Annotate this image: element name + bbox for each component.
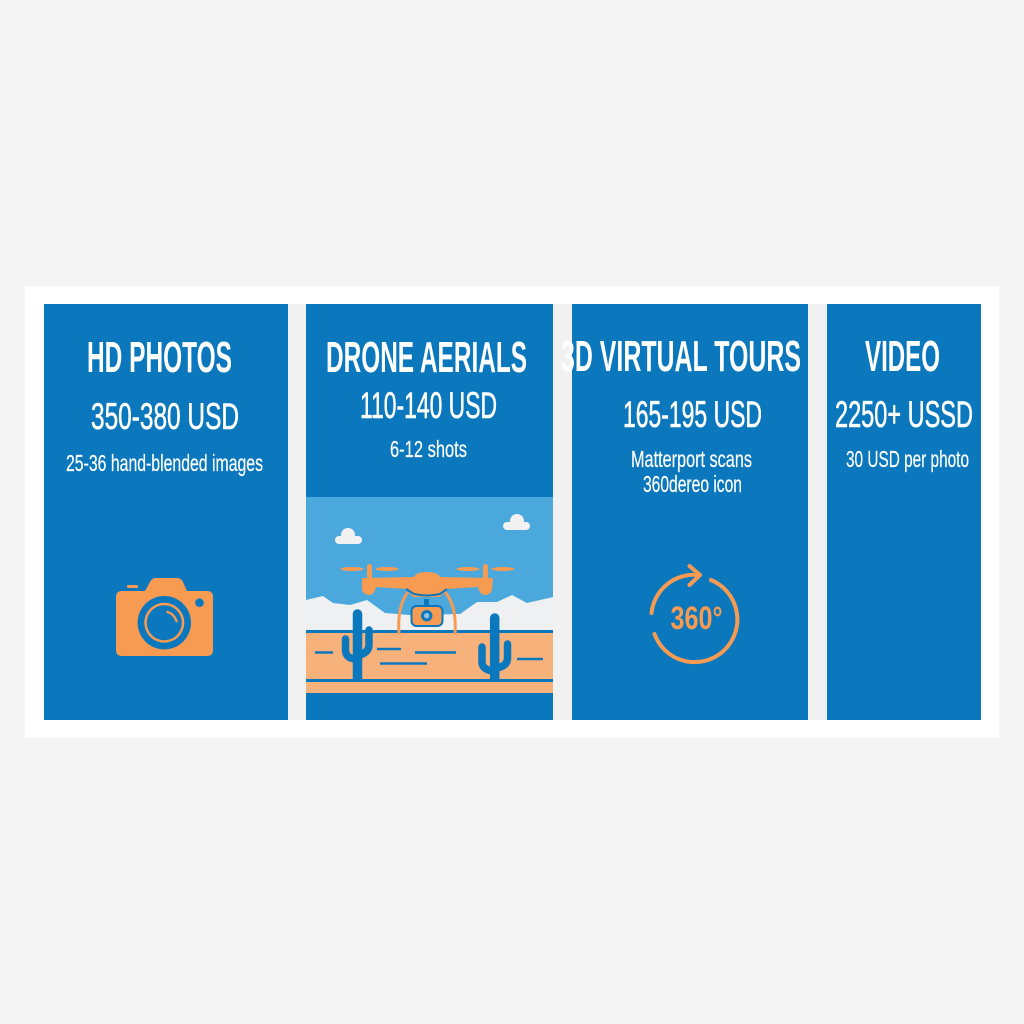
price: drone aerials: 110-140 USD xyxy=(360,385,497,426)
gimbal outline xyxy=(406,589,447,596)
propellers xyxy=(340,564,514,579)
panel: drone aerials xyxy=(306,304,553,720)
cactus left xyxy=(346,609,369,680)
heading: video: VIDEO xyxy=(865,332,940,381)
heading: drone aerials: DRONE AERIALS xyxy=(326,333,527,382)
outer card xyxy=(25,286,999,738)
camera pod xyxy=(412,606,442,626)
panel: HD photos xyxy=(44,304,288,720)
heading: 3D virtual tours: 3D VIRTUAL TOURS xyxy=(561,332,801,381)
description: 3D virtual tours xyxy=(631,446,752,497)
heading: HD photos: HD PHOTOS xyxy=(87,333,232,382)
drone xyxy=(340,564,514,634)
sand xyxy=(306,631,553,693)
description: 3D virtual tours: Matterport scans xyxy=(631,446,752,472)
clouds xyxy=(335,514,530,544)
snowy mountains xyxy=(306,595,553,632)
landing legs xyxy=(399,592,455,634)
description: 3D virtual tours: 360dereo icon xyxy=(643,471,742,497)
description: drone aerials: 6-12 shots xyxy=(390,436,467,462)
price: 3D virtual tours: 165-195 USD xyxy=(623,394,762,435)
panel: 3D virtual tours xyxy=(561,304,808,720)
cactus right xyxy=(482,613,508,680)
price: HD photos: 350-380 USD xyxy=(91,396,239,437)
sand dashes xyxy=(315,649,543,664)
icon: camera xyxy=(116,578,213,656)
illustration: drone over desert xyxy=(306,497,553,693)
icon: 360 degree: 360° xyxy=(670,600,722,636)
panel: video xyxy=(827,304,981,720)
gimbal mount xyxy=(424,599,429,607)
body and arms xyxy=(362,572,493,597)
icon: 360 degree xyxy=(652,566,737,662)
description: HD photos: 25-36 hand-blended images xyxy=(66,450,263,476)
